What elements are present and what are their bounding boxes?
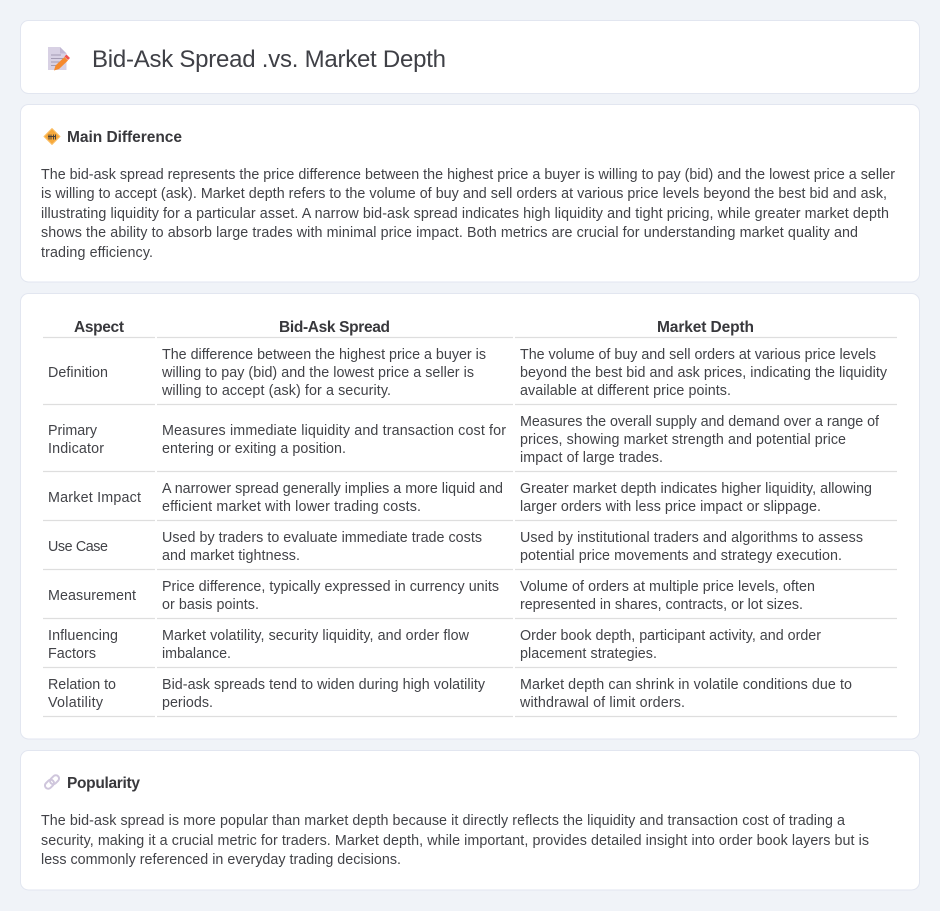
row: market impact: Greater market depth indicates higher liquidity, allowing — [520, 481, 872, 497]
row: relation to volatility: Relation to — [48, 677, 116, 693]
panel: main difference — [20, 104, 920, 282]
panel: popularity — [20, 750, 920, 890]
row: influencing factors: Order book depth, participant activity, and order — [520, 628, 821, 644]
row: measurement: Price difference, typically expressed in currency units — [162, 579, 499, 595]
row: measurement: Volume of orders at multiple price levels, often — [520, 579, 815, 595]
row: definition: willing to accept (ask) for a security. — [161, 383, 391, 399]
row: measurement — [48, 579, 815, 613]
row: definition: available at different price points. — [520, 383, 731, 399]
row: market impact: efficient market with lower trading costs. — [162, 499, 421, 515]
row: market impact — [48, 481, 872, 515]
heading: popularity: Popularity — [67, 775, 140, 792]
panel: header — [20, 20, 920, 94]
text block: main difference paragraph: The bid-ask spread represents the price difference between the highest price a buyer is willing to pay (bid) and the lowest price a seller — [41, 167, 895, 183]
row: use case: Use Case — [48, 539, 108, 555]
row: primary indicator: Measures the overall supply and demand over a range of — [520, 414, 879, 430]
row: definition: beyond the best bid and ask prices, indicating the liquidity — [520, 365, 888, 381]
text block: popularity paragraph: The bid-ask spread is more popular than market depth because it directly reflects the liquidity and transaction cost of trading a — [41, 813, 845, 829]
icon: diamond warning sign — [44, 128, 60, 144]
row: definition: Definition — [48, 365, 108, 381]
table header row: Market Depth — [657, 319, 754, 336]
row: influencing factors — [48, 628, 821, 662]
panel: comparison table — [20, 294, 920, 739]
heading: main difference: Main Difference — [67, 129, 182, 146]
row: relation to volatility: periods. — [162, 695, 213, 711]
row: primary indicator — [48, 414, 879, 466]
row: primary indicator: entering or exiting a position. — [162, 441, 346, 457]
text block: popularity paragraph: less commonly referenced in everyday trading decisions. — [41, 852, 401, 868]
text block: main difference paragraph: shows the ability to absorb large trades with minimal price impact. Both metrics are crucial for understanding market quality and — [41, 225, 858, 241]
row: relation to volatility: withdrawal of limit orders. — [519, 695, 685, 711]
row: definition: The difference between the highest price a buyer is — [162, 347, 486, 363]
row: use case: and market tightness. — [162, 548, 300, 564]
row: influencing factors: Market volatility, security liquidity, and order flow — [162, 628, 470, 644]
text block: main difference paragraph: trading efficiency. — [41, 245, 153, 261]
row: measurement: Measurement — [48, 588, 136, 604]
row: primary indicator: prices, showing market strength and potential price — [520, 432, 846, 448]
row: definition: willing to pay (bid) and the lowest price a seller is — [161, 365, 474, 381]
title: Bid-Ask Spread .vs. Market Depth — [92, 46, 446, 73]
row: influencing factors: Factors — [48, 646, 96, 662]
row: relation to volatility: Bid-ask spreads tend to widen during high volatility — [162, 677, 486, 693]
row: measurement: represented in shares, contracts, or lot sizes. — [520, 597, 803, 613]
row: relation to volatility: Volatility — [48, 695, 104, 711]
icon: memo with pencil — [48, 47, 70, 70]
text block: main difference paragraph — [41, 167, 895, 261]
row: influencing factors: imbalance. — [162, 646, 231, 662]
text block: main difference paragraph: illustrating liquidity for a particular asset. A narrow bid-ask spread indicates high liquidity and tight pricing, while greater market depth — [41, 206, 889, 222]
row: use case: potential price movements and strategy execution. — [520, 548, 842, 564]
row: influencing factors: placement strategies. — [520, 646, 657, 662]
row: influencing factors: Influencing — [48, 628, 118, 644]
row: use case — [48, 530, 863, 564]
row: market impact: A narrower spread generally implies a more liquid and — [162, 481, 503, 497]
table header row — [74, 319, 754, 336]
row: market impact: Market Impact — [48, 490, 141, 506]
text block: popularity paragraph — [41, 813, 869, 868]
text block: main difference paragraph: is willing to accept (ask). Market depth refers to the volume of buy and sell orders at various price levels beyond the best bid and ask, — [41, 186, 887, 202]
table header row: Aspect — [74, 319, 124, 336]
row: measurement: or basis points. — [162, 597, 259, 613]
row: primary indicator: Indicator — [48, 441, 104, 457]
row: definition: The volume of buy and sell orders at various price levels — [520, 347, 876, 363]
row: primary indicator: Primary — [48, 423, 98, 439]
row: primary indicator: impact of large trades. — [520, 450, 663, 466]
icon: chain link — [44, 774, 60, 790]
row: definition — [48, 347, 888, 399]
row: relation to volatility: Market depth can shrink in volatile conditions due to — [520, 677, 852, 693]
table header row: Bid-Ask Spread — [279, 319, 390, 336]
text block: popularity paragraph: security, making it a crucial metric for traders. Market depth, while important, provides detailed insight into order book layers but is — [41, 833, 869, 849]
row: primary indicator: Measures immediate liquidity and transaction cost for — [162, 423, 506, 439]
row: use case: Used by traders to evaluate immediate trade costs — [162, 530, 482, 546]
row: relation to volatility — [48, 677, 852, 711]
row: use case: Used by institutional traders and algorithms to assess — [520, 530, 863, 546]
row: market impact: larger orders with less price impact or slippage. — [520, 499, 821, 515]
